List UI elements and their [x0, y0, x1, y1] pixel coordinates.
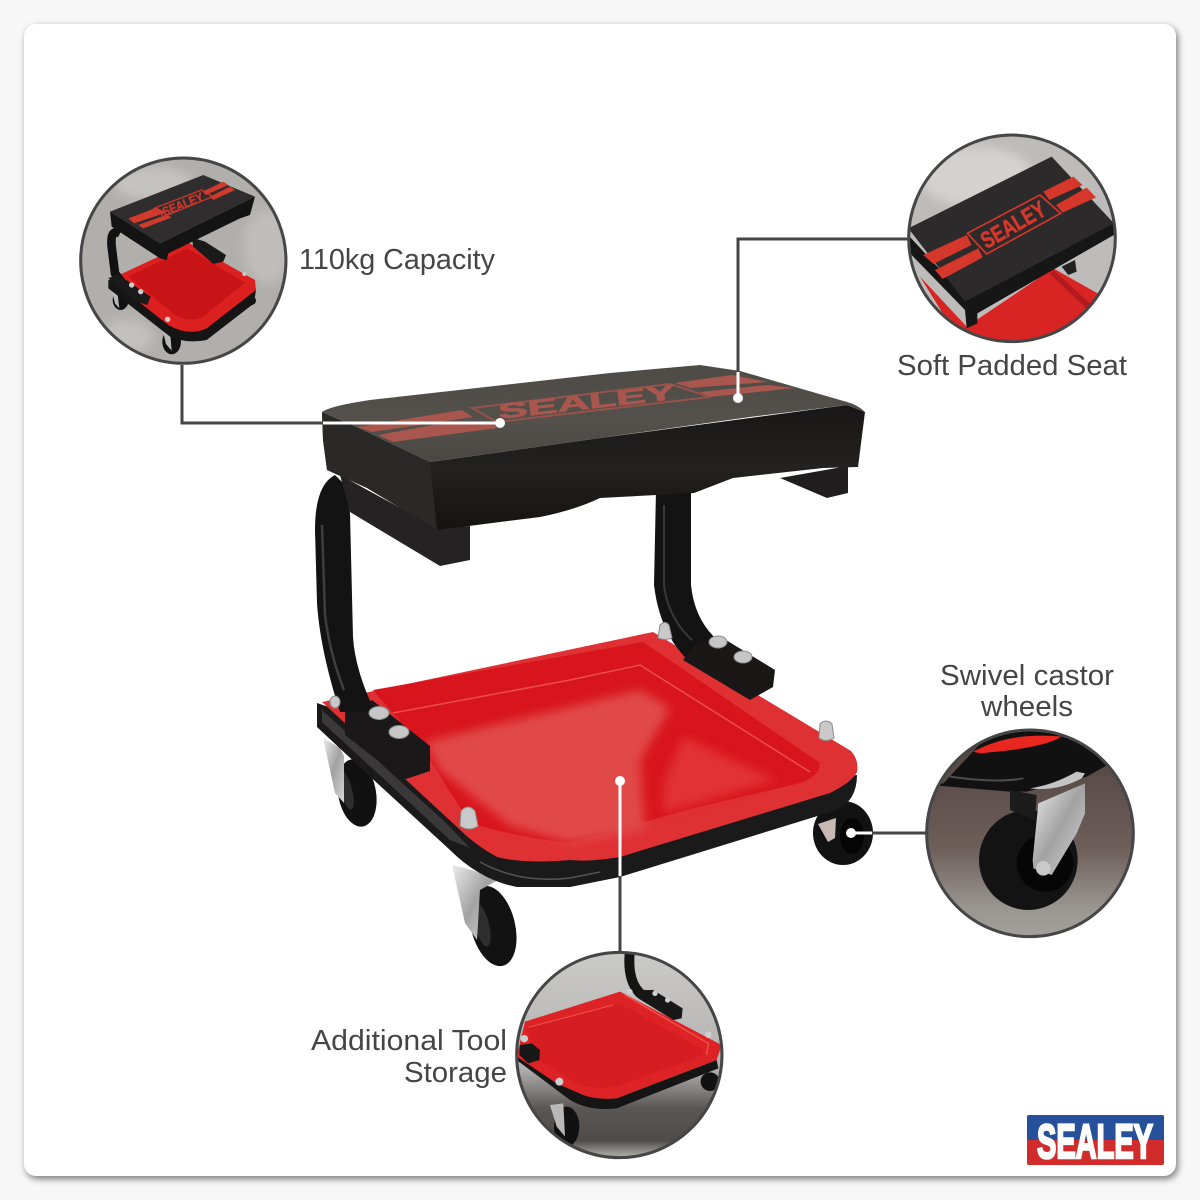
seat cushion side: [322, 412, 437, 530]
tray pan: [373, 642, 820, 843]
product: creeper seat stool: [315, 365, 873, 971]
front castor: [452, 865, 524, 971]
seat cushion front: [322, 405, 865, 530]
pan ridge lines: [393, 665, 810, 772]
callout line: capacity: [182, 365, 505, 428]
callout line: padded seat: [733, 239, 909, 403]
seat top surface: [322, 365, 865, 462]
bolts: [330, 622, 834, 829]
seat stripes: [357, 375, 795, 442]
label: tool storage: [311, 1025, 507, 1089]
label: padded seat: Soft Padded Seat: [897, 350, 1127, 382]
callout line: storage: [615, 776, 625, 952]
pan floor highlight: [663, 737, 777, 813]
frame tube highlight: [480, 862, 600, 879]
label: castor wheels: [940, 660, 1114, 723]
rear foot block: [683, 637, 775, 700]
inset circle: full stool: SEALEY: [161, 190, 206, 219]
label: capacity: 110kg Capacity: [299, 244, 495, 276]
callout line: castor: [846, 828, 927, 838]
rear leg highlight: [664, 505, 692, 640]
tray frame: [317, 703, 857, 887]
pan floor light area: [425, 690, 670, 843]
inset circle: padded seat: SEALEY: [976, 196, 1051, 254]
label: tool storage: Additional Tool: [311, 1025, 507, 1057]
seat logo plate: SEALEY: [497, 381, 676, 424]
label: castor wheels: wheels: [980, 691, 1073, 723]
rear support leg: [654, 485, 725, 662]
front support leg: [315, 475, 375, 712]
rear left castor: [323, 738, 382, 830]
inset circle: full stool: [79, 156, 288, 365]
front leg highlight: [322, 525, 344, 690]
seat logo plate: [472, 381, 710, 424]
seat support block front: [340, 475, 470, 566]
inset circle: padded seat: [907, 134, 1117, 344]
acorn nuts: [330, 622, 834, 829]
front foot block: [345, 700, 430, 780]
hex bolts: [369, 636, 752, 738]
rear right castor: [813, 801, 873, 865]
red tray: [322, 632, 857, 861]
inset circle: tool tray: [515, 950, 724, 1160]
frame side sheen: [322, 710, 470, 848]
seat support block rear: [780, 466, 848, 498]
label: tool storage: Storage: [404, 1057, 507, 1089]
inset circle: castor wheel: [925, 728, 1135, 938]
label: castor wheels: Swivel castor: [940, 660, 1114, 692]
